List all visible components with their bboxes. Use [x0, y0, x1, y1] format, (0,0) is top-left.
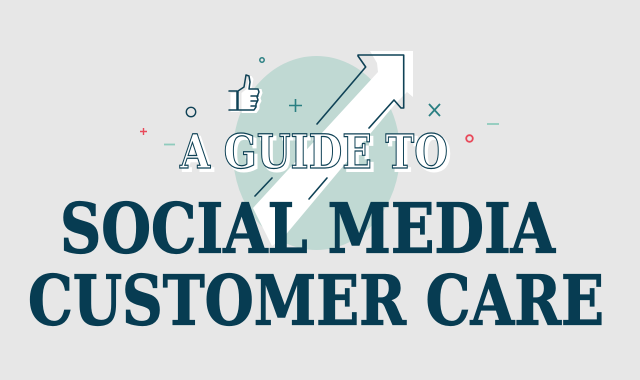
- heading: A Guide To: A GUIDE TO: [179, 125, 448, 180]
- decoration: mint dash right: [487, 123, 499, 125]
- decoration: teal plus: [289, 99, 302, 112]
- heading: A Guide To: A GUIDE TO: [182, 128, 451, 183]
- background circle: [233, 56, 400, 250]
- decoration: mint dash: [164, 144, 175, 146]
- decoration: red plus: [140, 128, 147, 135]
- title line 1: SOCIAL MEDIA: [60, 190, 556, 270]
- icon: thumbs up: [229, 75, 262, 113]
- decoration: navy ring: [186, 107, 196, 117]
- decoration: teal cross: [429, 104, 440, 116]
- icon: rising arrow: [253, 51, 413, 246]
- decoration: small teal ring: [260, 58, 264, 62]
- decoration: red ring: [466, 135, 473, 142]
